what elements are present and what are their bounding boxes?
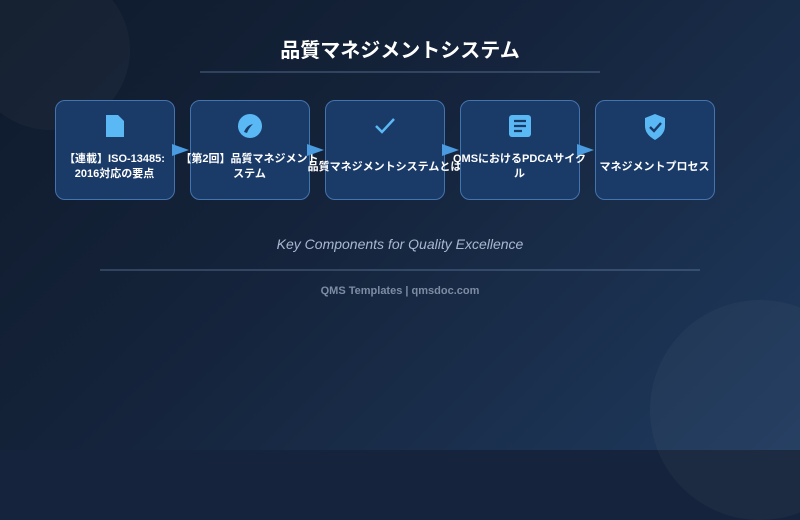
icon: shield check <box>645 114 665 140</box>
icon: document <box>509 115 531 137</box>
card 4 text: QMSにおけるPDCAサイク <box>453 153 586 165</box>
card 4 <box>460 100 580 200</box>
arrow 2 <box>307 144 324 156</box>
card 1 text: 2016対応の要点 <box>75 168 154 180</box>
arrow 3 <box>442 144 459 156</box>
card 1 <box>55 100 175 200</box>
title: 品質マネジメントシステム <box>280 40 520 62</box>
card 2 text: ステム <box>233 168 266 180</box>
card 2 text <box>180 152 319 180</box>
card 1 text <box>64 152 165 180</box>
card 2 text: 【第2回】品質マネジメント <box>180 153 319 165</box>
icon: file <box>106 115 124 137</box>
card 4 text: ル <box>514 168 525 180</box>
card 3 text: 品質マネジメントシステムとは <box>308 160 461 172</box>
card 3 <box>325 100 445 200</box>
card 5 text: マネジメントプロセス <box>600 160 710 172</box>
footer: QMS Templates | qmsdoc.com <box>321 285 479 297</box>
arrow 1 <box>172 144 189 156</box>
card 2 <box>190 100 310 200</box>
card 1 text: 【連載】ISO-13485: <box>64 153 165 165</box>
icon: leaf circle <box>238 114 262 138</box>
card 4 text <box>453 153 586 180</box>
arrow 4 <box>577 144 594 156</box>
subtitle: Key Components for Quality Excellence <box>277 236 523 252</box>
card 5 <box>595 100 715 200</box>
icon: check <box>375 118 395 134</box>
